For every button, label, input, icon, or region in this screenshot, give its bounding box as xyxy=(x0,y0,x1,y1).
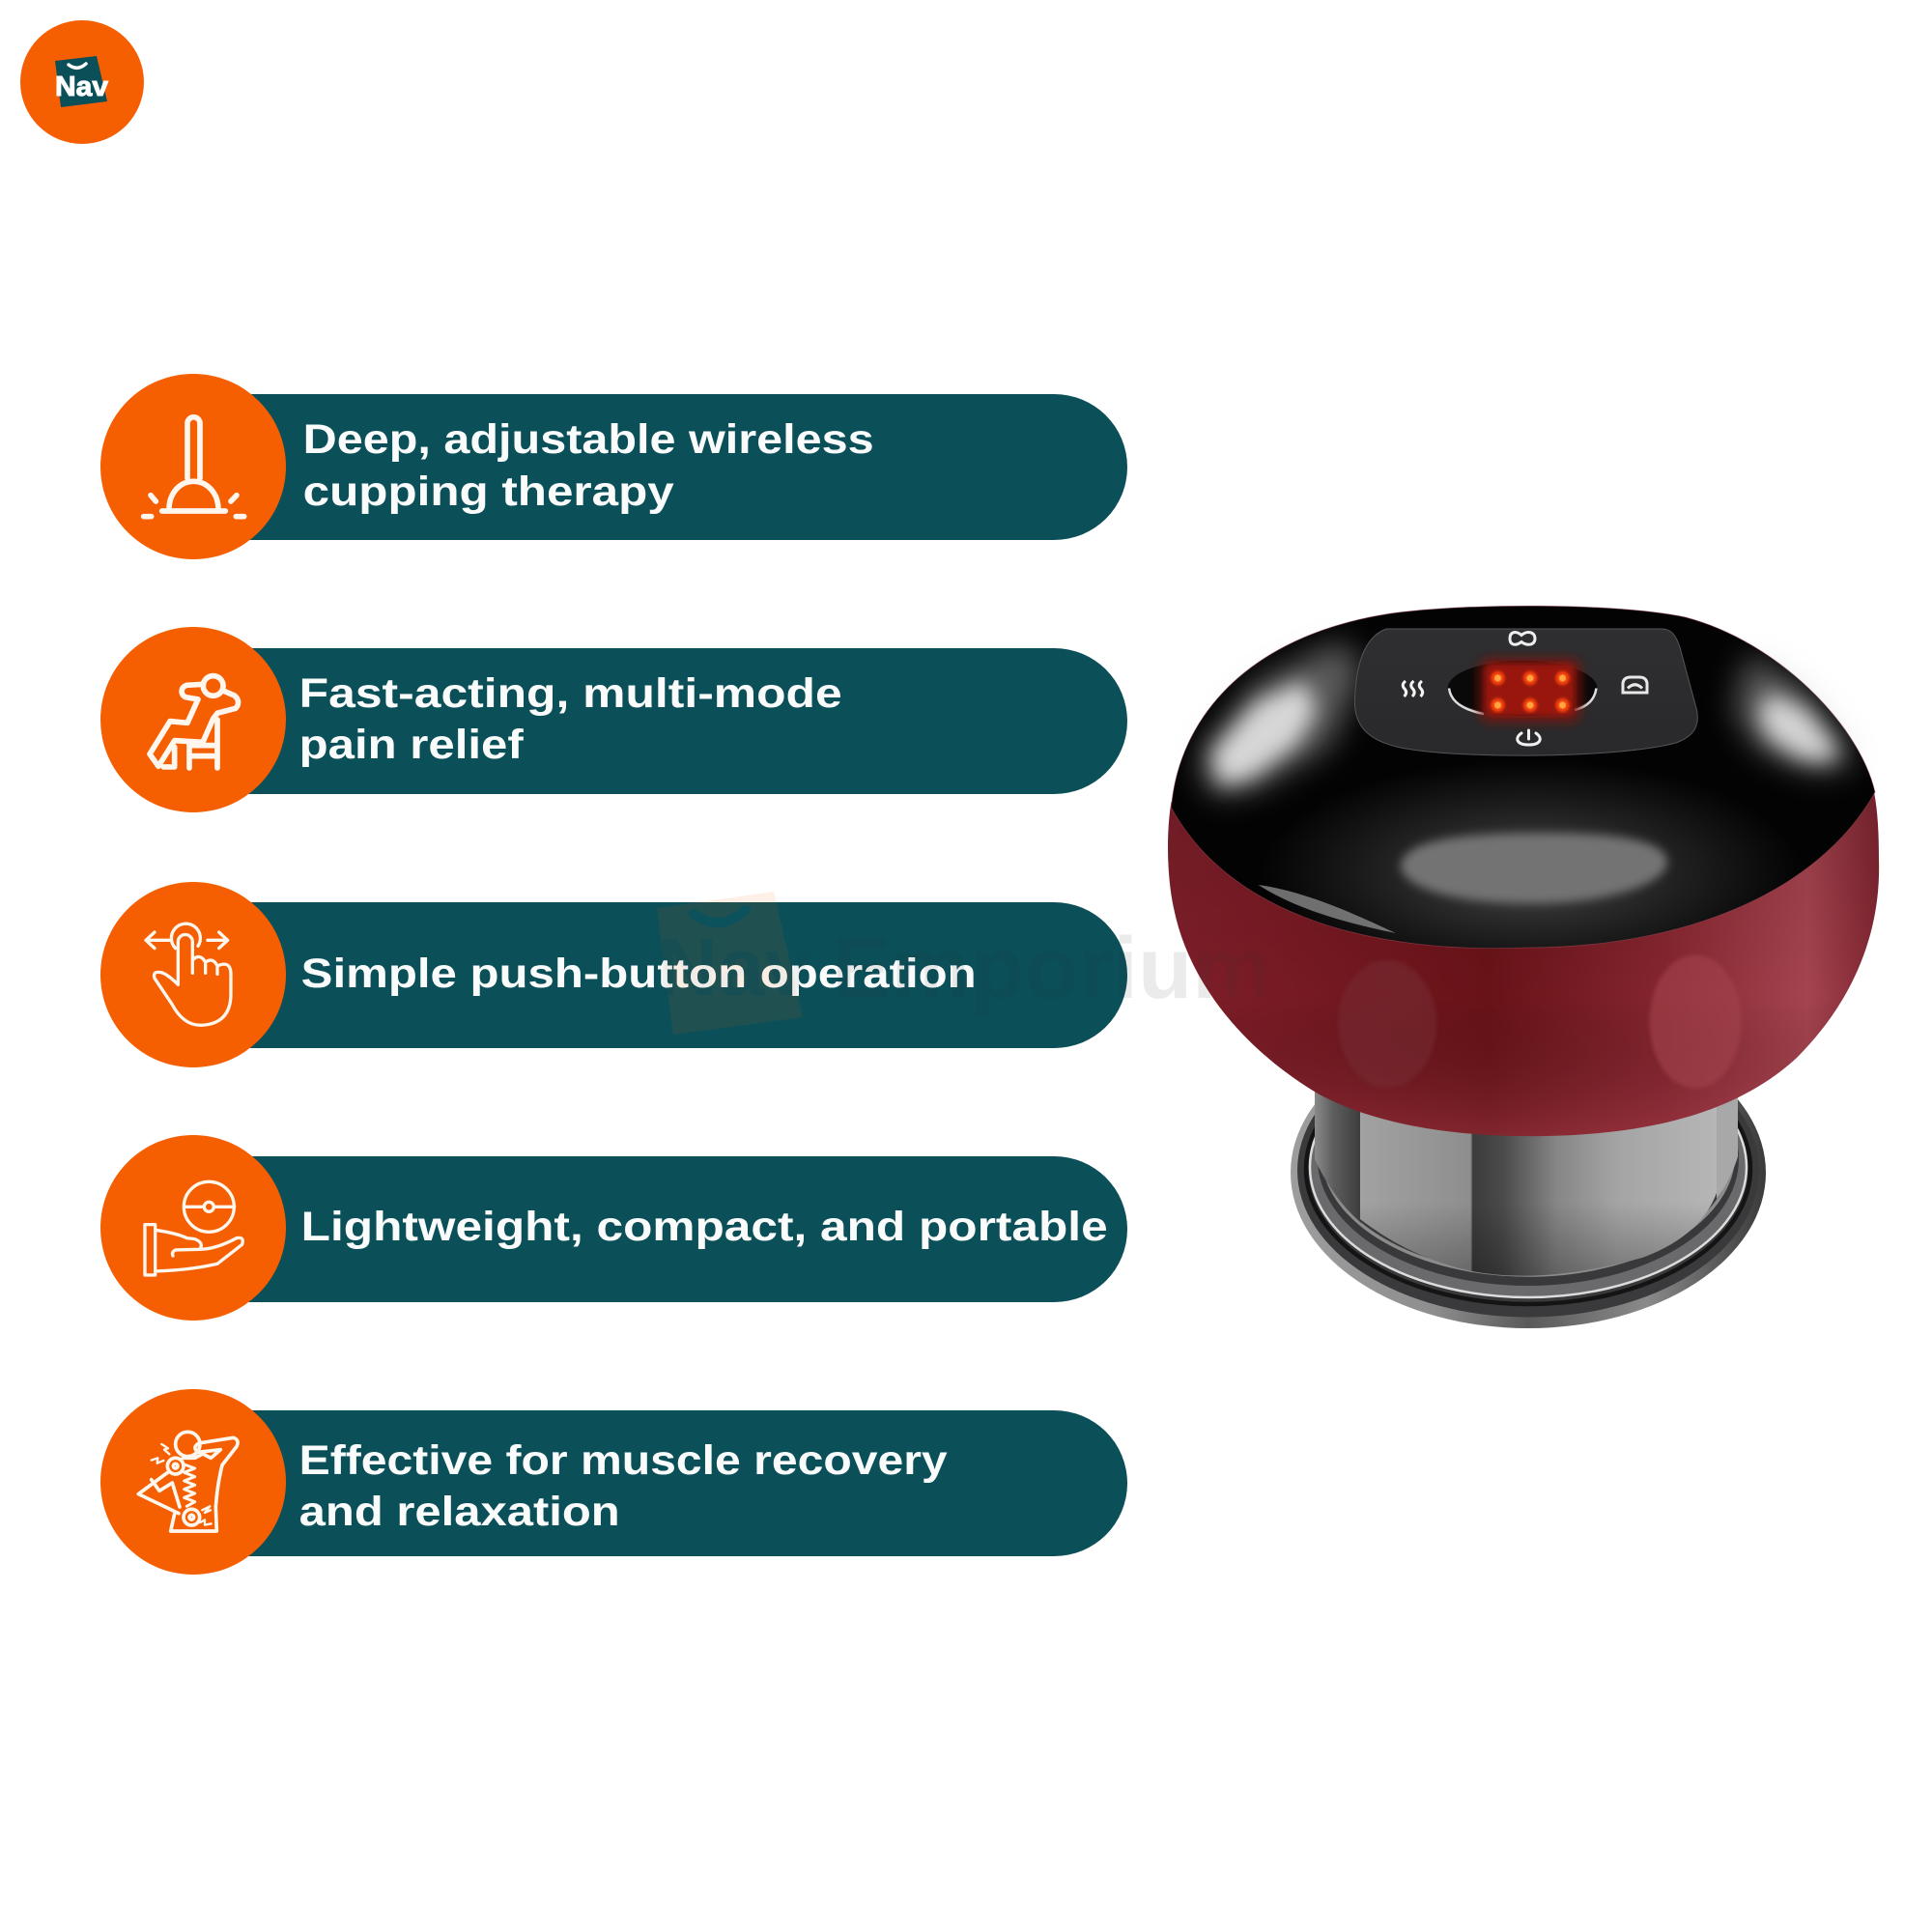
watermark tag xyxy=(657,892,803,1035)
glossy black dome xyxy=(1171,606,1875,949)
control panel xyxy=(1354,629,1697,755)
text: Simple push-button operation xyxy=(301,951,977,997)
feature row 3 xyxy=(100,882,1127,1067)
logo circle xyxy=(20,20,144,144)
icon: back pain figure xyxy=(138,1432,238,1531)
logo smile xyxy=(69,64,86,68)
icon: heat symbol xyxy=(1403,681,1423,696)
logo badge xyxy=(20,20,144,144)
text: Effective for muscle recovery xyxy=(299,1437,948,1484)
watermark tag name: Nav xyxy=(657,922,811,1012)
logo tag shape xyxy=(55,56,107,107)
watermark wordmark: Emporium xyxy=(832,921,1271,1017)
red LED window xyxy=(1478,657,1582,724)
text: Fast-acting, multi-mode xyxy=(299,670,842,717)
bar xyxy=(193,394,1127,540)
icon: cup symbol xyxy=(1623,677,1647,693)
feature row 5 xyxy=(100,1389,1127,1575)
icon: hand holding device xyxy=(145,1181,242,1275)
badge circle xyxy=(100,1389,286,1575)
badge circle xyxy=(100,374,286,559)
feature row 1 xyxy=(100,374,1127,559)
icon: mode symbol xyxy=(1510,633,1535,644)
text: pain relief xyxy=(299,722,524,768)
text: Lightweight, compact, and portable xyxy=(301,1204,1108,1250)
badge circle xyxy=(100,1135,286,1321)
logo wordmark: Nav xyxy=(55,71,108,102)
feature row 4 xyxy=(100,1135,1127,1321)
glass cylinder xyxy=(1315,1087,1738,1276)
silicone body xyxy=(1168,792,1879,1136)
badge circle xyxy=(100,627,286,812)
dome highlights xyxy=(1202,641,1850,933)
text: and relaxation xyxy=(299,1489,620,1535)
finger dimple left xyxy=(1338,960,1436,1088)
display oval xyxy=(1447,661,1598,716)
bar xyxy=(193,902,1127,1048)
icon: power symbol xyxy=(1518,730,1540,745)
icon: plunger xyxy=(144,417,244,517)
feature row 2 xyxy=(100,627,1127,812)
watermark xyxy=(657,892,1271,1035)
icon: touch gesture hand xyxy=(146,923,231,1025)
text: Deep, adjustable wireless xyxy=(303,416,874,463)
base ring xyxy=(1291,1017,1766,1328)
bar xyxy=(193,648,1127,794)
text: cupping therapy xyxy=(303,469,674,515)
bar xyxy=(193,1410,1127,1556)
watermark smile xyxy=(694,910,746,923)
badge circle xyxy=(100,882,286,1067)
silicone body shading xyxy=(1168,792,1879,1136)
finger dimple right xyxy=(1650,954,1741,1088)
display oval rim xyxy=(1449,688,1596,714)
icon: reclining person xyxy=(150,676,239,768)
LED dots xyxy=(1492,671,1569,712)
product: cupping device xyxy=(1168,606,1879,1328)
bar xyxy=(193,1156,1127,1302)
